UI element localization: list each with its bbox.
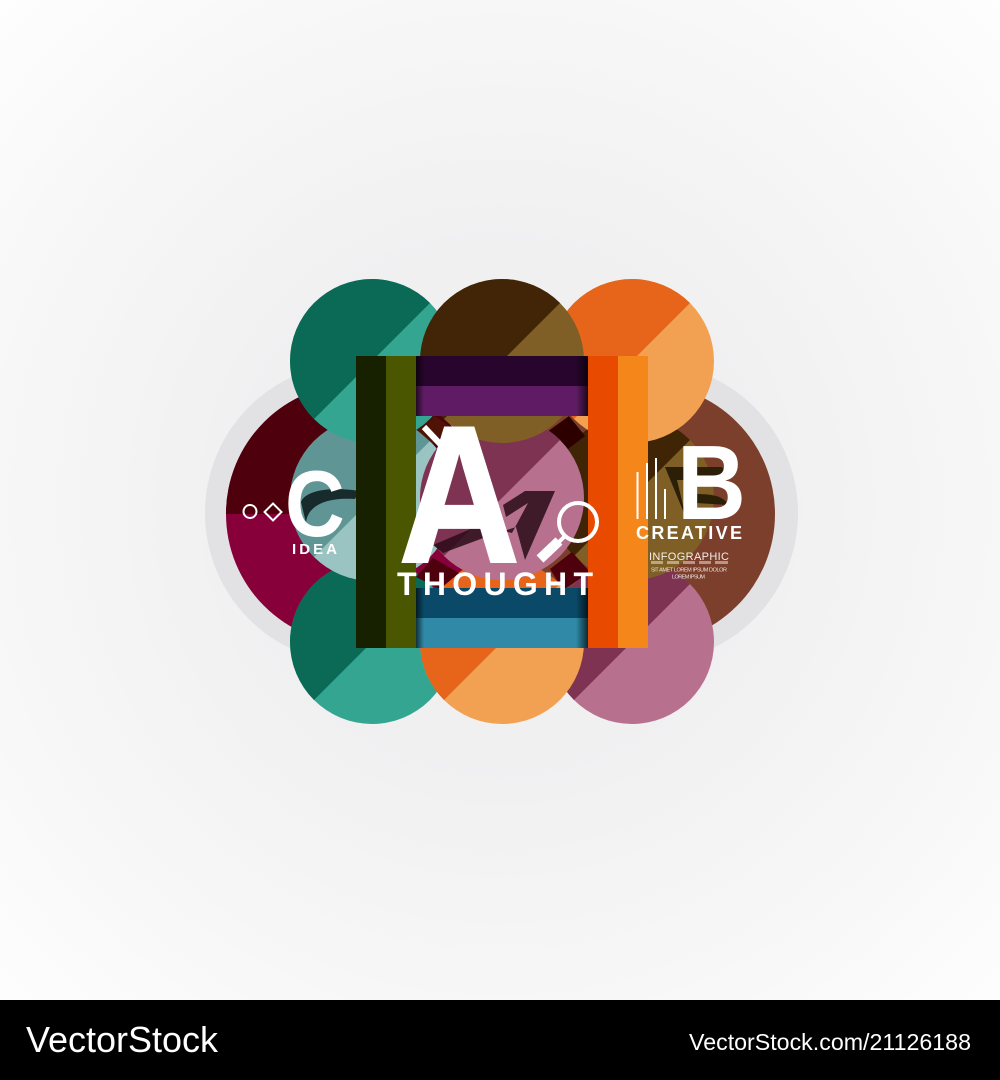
label: INFOGRAPHIC: INFOGRAPHIC xyxy=(649,551,729,563)
label: CREATIVE: CREATIVE xyxy=(636,523,742,543)
small bars xyxy=(651,561,728,564)
small text lines: LOREM IPSUM xyxy=(672,574,705,580)
small text lines: SIT AMET LOREM IPSUM DOLOR xyxy=(651,568,727,574)
icon: dark arrow behind B xyxy=(665,467,728,518)
middle circle: olive xyxy=(550,416,714,580)
footer bar xyxy=(0,1000,1000,1080)
top circle: teal xyxy=(290,279,454,443)
icon: vertical lines xyxy=(638,458,665,519)
top circle: brown xyxy=(420,279,584,443)
large circle: maroon (left) xyxy=(226,384,486,644)
icon: dark swoosh behind C xyxy=(301,489,359,523)
middle circle: pink xyxy=(420,416,584,580)
letter C: C xyxy=(285,451,345,556)
square frame: left green strips xyxy=(356,356,416,648)
middle circle: pale teal xyxy=(290,417,454,581)
small text lines xyxy=(651,568,727,580)
bottom circle: orange xyxy=(420,560,584,724)
footer url: VectorStock.com/21126188 xyxy=(689,1029,971,1055)
square frame: bottom band xyxy=(416,588,588,648)
icon: white tick above A xyxy=(424,427,442,446)
square frame: right orange strips xyxy=(588,356,648,648)
square frame: top band xyxy=(416,356,588,416)
dark corner shapes behind centre circle xyxy=(416,416,590,590)
footer logo: VectorStock xyxy=(26,1019,219,1060)
label: IDEA: IDEA xyxy=(292,541,337,558)
right outer ring xyxy=(498,363,798,663)
left outer ring xyxy=(205,363,505,663)
bottom circle: teal xyxy=(290,560,454,724)
letter A: A xyxy=(399,387,519,603)
label: THOUGHT: THOUGHT xyxy=(397,566,593,602)
bottom circle: mauve xyxy=(550,560,714,724)
icon: dark paper plane behind A xyxy=(433,491,555,560)
icon: circle and diamond xyxy=(244,504,282,520)
top circle: orange xyxy=(550,279,714,443)
icon: magnifier xyxy=(540,503,597,559)
letter B: B xyxy=(677,424,746,542)
large circle: brown (right) xyxy=(515,384,775,644)
